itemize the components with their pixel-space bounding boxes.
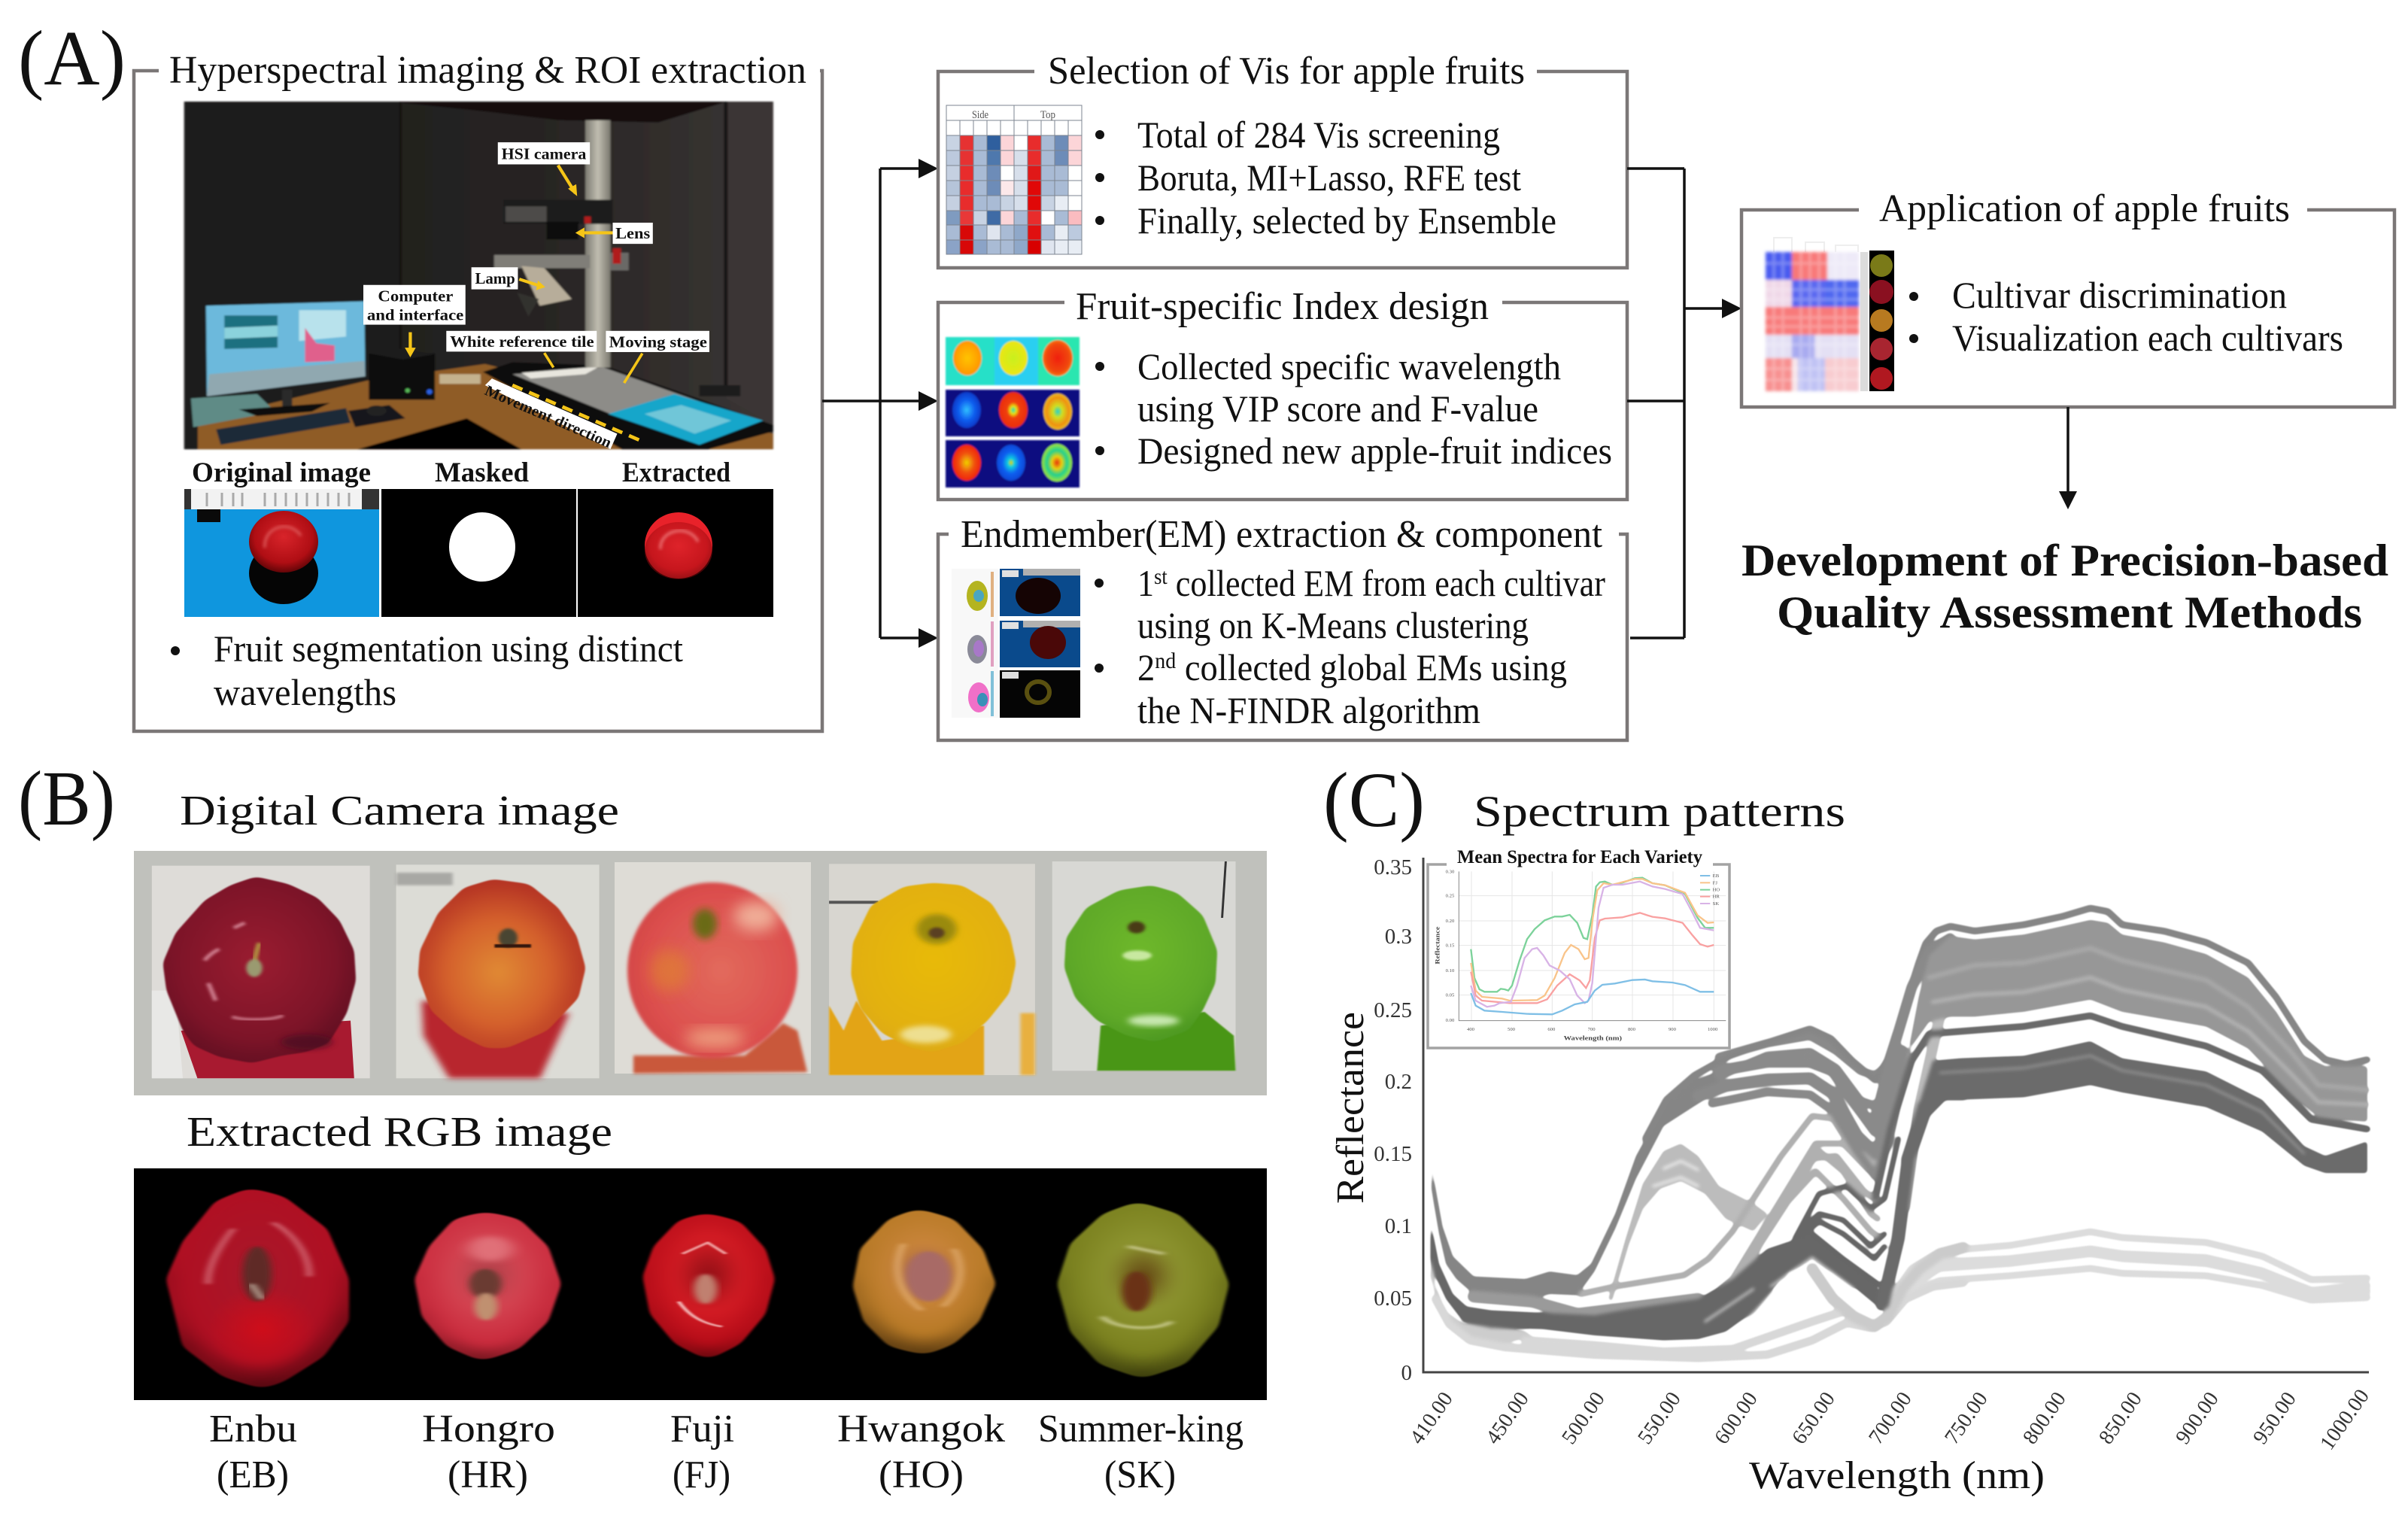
cultivar labels: Fuji <box>670 1408 734 1450</box>
conclusion: development of precision-based methods: Development of Precision-based <box>1741 536 2388 585</box>
x axis ticks: 1000.00 <box>2315 1385 2374 1454</box>
inset line chart: 700 <box>1588 1027 1596 1032</box>
bullet: fruit segmentation: wavelengths <box>214 671 396 713</box>
bullet list: endmember: using on K-Means clustering <box>1137 604 1529 646</box>
callout: computer and interface <box>363 285 466 357</box>
heading: application: Application of apple fruits <box>1879 187 2290 230</box>
label (A): (A) <box>18 15 126 102</box>
cultivar labels: (HR) <box>448 1454 528 1496</box>
x axis ticks: 700.00 <box>1864 1388 1917 1449</box>
callout: white reference tile <box>446 331 597 368</box>
bullet list: index design <box>1095 345 1612 472</box>
bullet list: endmember: 2 <box>1137 646 1156 688</box>
heading: digital camera image: Digital Camera image <box>180 788 619 834</box>
arrow: down to conclusion <box>2059 407 2077 509</box>
callout: computer and interface: Computer <box>378 287 454 305</box>
apple: Fuji extracted <box>642 1213 775 1360</box>
apple: Hongro extracted <box>414 1211 561 1362</box>
label (C): (C) <box>1323 757 1425 843</box>
y axis ticks: 0.25 <box>1374 998 1412 1022</box>
apple: Enbu extracted <box>165 1187 349 1390</box>
panel: fruit-specific index design <box>938 285 1627 500</box>
inset line chart: Reflectance <box>1434 926 1441 964</box>
arrow: from imaging panel to three method panels <box>822 159 938 648</box>
arrow: from method panels to application panel <box>1627 169 1741 638</box>
inset line chart: SK <box>1713 901 1719 907</box>
x axis ticks: 500.00 <box>1557 1388 1610 1449</box>
bullet list: VI selection: Total of 284 Vis screening <box>1137 114 1500 156</box>
callout: lens: Lens <box>615 224 650 242</box>
bullet list: endmember: collected EM from each cultivar <box>1168 562 1605 604</box>
photo: Summer-king <box>1052 861 1236 1071</box>
callout: HSI camera: HSI camera <box>502 145 587 163</box>
label: original image: Original image <box>192 457 371 488</box>
heading: endmember extraction: Endmember(EM) extraction & component <box>961 513 1603 556</box>
y axis ticks: 0.2 <box>1385 1070 1412 1094</box>
inset line chart: HO <box>1713 888 1720 893</box>
callout: movement direction: Movement direction <box>482 382 614 451</box>
cultivar labels: Enbu <box>209 1408 297 1450</box>
y axis ticks: 0 <box>1401 1361 1412 1385</box>
cultivar labels: Summer-king <box>1038 1408 1243 1450</box>
callout: moving stage: Moving stage <box>609 333 707 351</box>
heading: fruit-specific index design: Fruit-specific Index design <box>1076 285 1489 328</box>
heading: spectrum patterns: Spectrum patterns <box>1474 787 1845 836</box>
chart: VI selection heatmap: Top <box>1040 109 1055 121</box>
image: index heat maps <box>946 337 1080 488</box>
label (B): (B) <box>18 755 115 842</box>
image: endmember maps <box>952 569 1080 718</box>
bullet list: VI selection <box>1095 114 1556 241</box>
heading: hyperspectral imaging: Hyperspectral imaging & ROI extraction <box>169 49 806 92</box>
x axis ticks: 410.00 <box>1405 1388 1458 1449</box>
x axis ticks: 600.00 <box>1710 1388 1763 1449</box>
y axis ticks: 0.15 <box>1374 1142 1412 1166</box>
bullet list: VI selection: Boruta, MI+Lasso, RFE test <box>1137 156 1521 199</box>
panel: endmember extraction <box>938 513 1627 740</box>
panel: digital camera photos <box>134 851 1267 1095</box>
panel: hyperspectral imaging and ROI extraction <box>134 49 822 731</box>
photo: Hongro <box>396 864 600 1078</box>
apple: Hwangok extracted <box>852 1208 996 1356</box>
inset line chart: 0.30 <box>1446 870 1455 875</box>
inset line chart: 0.15 <box>1446 943 1455 949</box>
panel: application of apple fruits <box>1741 187 2394 407</box>
photo: Fuji <box>615 862 811 1074</box>
band: low NIR cluster <box>1901 1041 2367 1207</box>
cultivar labels: (HO) <box>879 1454 964 1496</box>
y axis ticks <box>1374 855 1412 1385</box>
x axis ticks: 950.00 <box>2249 1388 2301 1449</box>
x axis ticks: 750.00 <box>1940 1388 1993 1449</box>
chart: reflectance spectra <box>1329 855 2374 1497</box>
image: extracted fruit <box>578 489 773 617</box>
chart: VI selection heatmap <box>946 105 1082 254</box>
bullet list: VI selection: Finally, selected by Ensemble <box>1137 199 1556 241</box>
panel: selection of VIs <box>938 50 1627 268</box>
x axis ticks: 450.00 <box>1481 1388 1534 1449</box>
x axis ticks: 850.00 <box>2094 1388 2147 1449</box>
bullet list: endmember: 1 <box>1137 562 1156 604</box>
inset line chart: 0.10 <box>1446 968 1455 974</box>
y axis ticks: 0.35 <box>1374 855 1412 879</box>
axis title: wavelength: Wavelength (nm) <box>1749 1454 2045 1497</box>
apple: Summer-king extracted <box>1057 1201 1229 1379</box>
bullet list: endmember <box>1095 562 1605 731</box>
axes <box>1423 858 2369 1372</box>
inset line chart <box>1434 870 1726 1041</box>
cultivar labels: Hwangok <box>837 1408 1005 1450</box>
heading: selection of VIs: Selection of Vis for apple fruits <box>1048 50 1525 93</box>
callout: lens <box>575 223 653 244</box>
y axis ticks: 0.3 <box>1385 925 1412 949</box>
label: masked: Masked <box>435 457 529 488</box>
inset line chart: 0.20 <box>1446 919 1455 924</box>
inset line chart: FJ <box>1713 880 1717 885</box>
bullet: fruit segmentation <box>171 627 683 713</box>
bullet list: endmember: the N-FINDR algorithm <box>1137 689 1480 731</box>
bullet list: index design: Collected specific wavelength <box>1137 345 1561 387</box>
conclusion: development of precision-based methods: Quality Assessment Methods <box>1777 588 2362 637</box>
bullet list: endmember: collected global EMs using <box>1176 646 1567 688</box>
photo: Hwangok <box>829 864 1035 1075</box>
inset line chart: EB <box>1713 873 1720 879</box>
bullet list: application: Visualization each cultivars <box>1952 317 2343 359</box>
label: extracted: Extracted <box>622 457 730 488</box>
bullet list: application <box>1909 274 2343 359</box>
callout: white reference tile: White reference tile <box>450 333 594 351</box>
bullet list: endmember: st <box>1154 564 1168 589</box>
callout: moving stage <box>606 331 709 383</box>
inset title: Mean Spectra for Each Variety <box>1457 847 1702 867</box>
bullet: fruit segmentation: Fruit segmentation using distinct <box>214 627 683 670</box>
chart: VI selection heatmap: Side <box>972 109 988 121</box>
chart: cultivar cluster heatmap <box>1766 238 1894 391</box>
inset line chart: 400 <box>1467 1027 1475 1032</box>
x axis ticks: 650.00 <box>1787 1388 1840 1449</box>
y axis ticks: 0.05 <box>1374 1286 1412 1311</box>
panel: extracted RGB apples <box>134 1168 1267 1400</box>
heading: extracted RGB image: Extracted RGB image <box>187 1109 612 1156</box>
conclusion: development of precision-based methods <box>1741 536 2388 637</box>
inset line chart: 500 <box>1508 1027 1516 1032</box>
inset line chart: 0.25 <box>1446 894 1455 899</box>
cultivar labels <box>209 1408 1243 1496</box>
inset: mean spectra for each variety <box>1428 847 1729 1048</box>
image: fruit mask <box>381 489 576 617</box>
cultivar labels: (FJ) <box>673 1454 730 1496</box>
cultivar labels: (EB) <box>217 1454 289 1496</box>
inset line chart: 800 <box>1628 1027 1636 1032</box>
callout: lamp: Lamp <box>475 269 515 287</box>
bullet list: index design: using VIP score and F-value <box>1137 387 1538 430</box>
x axis ticks: 550.00 <box>1633 1388 1686 1449</box>
bullet list: endmember: nd <box>1155 649 1176 673</box>
photo: HSI system setup <box>184 102 773 451</box>
cultivar labels: Hongro <box>422 1408 555 1450</box>
bullet list: index design: Designed new apple-fruit indices <box>1137 430 1612 472</box>
bullet list: application: Cultivar discrimination <box>1952 274 2287 316</box>
inset line chart: 600 <box>1547 1027 1556 1032</box>
spectra curves <box>1430 908 2367 1358</box>
x axis ticks: 900.00 <box>2171 1388 2224 1449</box>
axis title: reflectance: Reflectance <box>1329 1012 1372 1204</box>
inset line chart: 0.00 <box>1446 1018 1455 1023</box>
inset line chart: HR <box>1713 895 1720 900</box>
y axis ticks: 0.1 <box>1385 1214 1412 1238</box>
band: high NIR cluster <box>1905 920 2367 1122</box>
callout: lamp <box>472 267 545 290</box>
cultivar labels: (SK) <box>1104 1454 1176 1496</box>
image: original apple on blue background <box>184 489 379 617</box>
callout: computer and interface: and interface <box>367 306 463 324</box>
inset line chart: Wavelength (nm) <box>1564 1034 1622 1041</box>
inset line chart: 900 <box>1669 1027 1677 1032</box>
x axis ticks: 800.00 <box>2018 1388 2071 1449</box>
callout: HSI camera <box>498 142 590 196</box>
x axis ticks <box>1405 1385 2374 1454</box>
inset line chart: 1000 <box>1708 1027 1718 1032</box>
inset line chart: 0.05 <box>1446 993 1455 998</box>
photo: Enbu <box>152 866 370 1078</box>
